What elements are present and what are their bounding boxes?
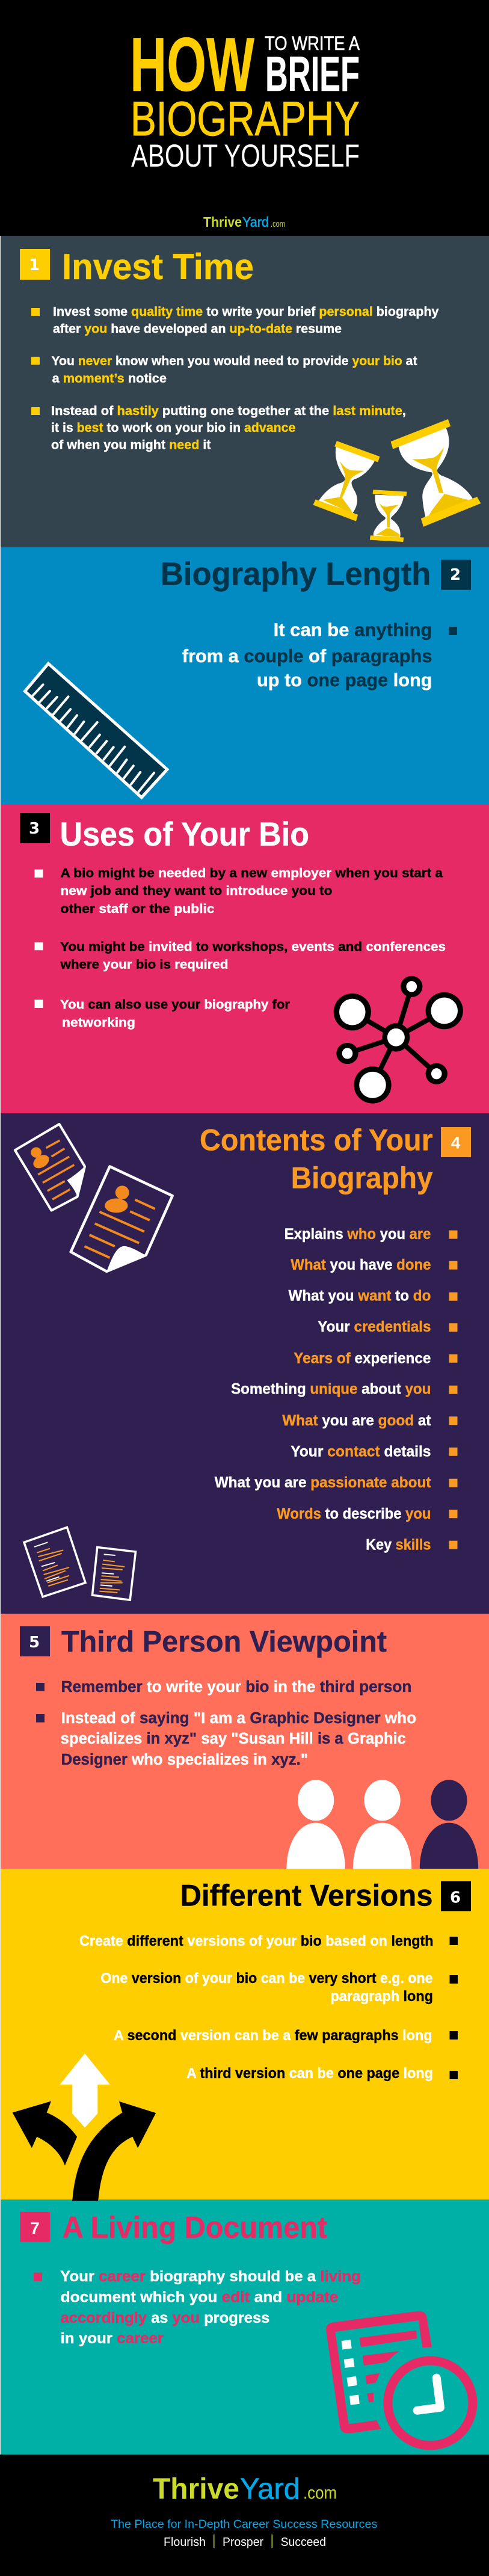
bullet list: A bio might be needed by a new employer when you start a: [60, 866, 443, 881]
number badge 2: 2: [450, 566, 461, 584]
icon: up arrow: [60, 2053, 110, 2127]
icon: checklist with clock: [326, 2311, 473, 2445]
panel: third person viewpoint: [0, 1614, 489, 1869]
number badge 7: [20, 2212, 50, 2242]
logo: ThriveYard.com: Thrive: [153, 2473, 239, 2506]
bullet list: after you have developed an up-to-date resume: [53, 322, 342, 336]
heading: A Living Document: A Living Document: [63, 2210, 327, 2244]
heading: Uses of Your Bio: Uses of Your Bio: [60, 815, 309, 853]
icon: person three: [420, 1780, 478, 1869]
checklist: [215, 1226, 457, 1553]
title: BIOGRAPHY: [131, 92, 360, 146]
number badge 5: [20, 1626, 50, 1656]
icon: left arrow: [13, 2101, 77, 2166]
icon: straight page: [92, 1547, 136, 1600]
bullet list: it is best to work on your bio in advance: [51, 421, 295, 435]
bullet list: You can also use your biography for: [60, 998, 290, 1012]
number badge 4: 4: [451, 1134, 461, 1152]
number badge 3: [20, 813, 50, 843]
logo: ThriveYard: Yard: [242, 214, 269, 230]
number badge 6: [441, 1881, 471, 1911]
bullet list: [31, 305, 439, 452]
checklist: What you are passionate about: [215, 1474, 431, 1491]
logo: ThriveYard: Thrive: [203, 214, 242, 230]
icon: person one: [286, 1780, 345, 1869]
bullet list: You might be invited to workshops, events and conferences: [60, 940, 446, 954]
checklist: Years of experience: [294, 1350, 431, 1366]
icon: large hourglass: [391, 419, 481, 527]
bullet list: Designer who specializes in xyz.": [61, 1751, 308, 1768]
icon: checklist: [326, 2311, 432, 2433]
icon: small hourglass: [370, 490, 407, 542]
checklist: Explains who you are: [284, 1226, 431, 1243]
bullet list: [36, 1679, 416, 1768]
checklist: Words to describe you: [277, 1505, 431, 1522]
icon: large resume: [71, 1166, 173, 1271]
bullet text: from a couple of paragraphs: [182, 645, 432, 666]
bullet list: Instead of saying "I am a Graphic Designer who: [61, 1710, 416, 1727]
bullet text: [34, 2268, 361, 2347]
bullet text: up to one page long: [257, 669, 432, 690]
header: [0, 0, 489, 236]
logo: ThriveYard.com: Yard: [240, 2473, 300, 2506]
number badge 1: 1: [29, 256, 40, 274]
logo: ThriveYard: .com: [271, 219, 285, 229]
bullet list: [79, 1933, 458, 2082]
number badge 1: [20, 249, 50, 280]
icon: clock: [388, 2361, 473, 2445]
motto: [164, 2535, 326, 2549]
heading: Contents of Your Biography: Contents of Your: [200, 1123, 433, 1157]
bullet list: One version of your bio can be very short e.g. one: [100, 1970, 432, 1987]
title: [130, 22, 360, 174]
bullet list: specializes in xyz" say "Susan Hill is a Graphic: [61, 1730, 406, 1747]
panel: uses of your bio: [0, 805, 489, 1113]
checklist: What you want to do: [289, 1288, 431, 1305]
bullet list: paragraph long: [331, 1988, 433, 2005]
number badge 3: 3: [29, 820, 40, 838]
tagline: The Place for In-Depth Career Success Resources: [111, 2518, 377, 2531]
icon: resumes: [15, 1124, 173, 1600]
motto: Prosper: [223, 2536, 263, 2549]
panel: contents of your biography: [0, 1113, 489, 1614]
bullet list: Create different versions of your bio based on length: [79, 1933, 434, 1949]
checklist: Your contact details: [291, 1443, 431, 1460]
bullet list: [35, 866, 446, 1030]
bullet list: of when you might need it: [51, 438, 211, 452]
panel: a living document: [0, 2199, 489, 2455]
bullet list: a moment’s notice: [52, 372, 167, 386]
heading: Biography Length: Biography Length: [161, 556, 431, 592]
title: BRIEF: [265, 47, 360, 102]
motto: Flourish: [164, 2536, 206, 2549]
icon: left hourglass: [313, 441, 380, 521]
logo: ThriveYard.com: [153, 2473, 337, 2506]
bullet list: networking: [62, 1016, 135, 1030]
title: TO WRITE A: [265, 32, 360, 54]
motto: Succeed: [281, 2536, 326, 2549]
heading: Different Versions: Different Versions: [180, 1879, 433, 1913]
panel: invest time: [0, 236, 489, 547]
icon: ruler: [25, 663, 167, 798]
icon: hourglasses: [313, 419, 481, 542]
heading: Invest Time: Invest Time: [62, 247, 254, 287]
bullet text: document which you edit and update: [61, 2289, 339, 2305]
bullet list: other staff or the public: [60, 902, 215, 916]
title: ABOUT YOURSELF: [131, 138, 360, 174]
icon: person two: [353, 1780, 411, 1869]
icon: right arrow: [72, 2101, 156, 2201]
panel: biography length: [0, 547, 489, 805]
number badge 2: [441, 560, 471, 590]
panel: different versions: [0, 1869, 489, 2201]
checklist: What you are good at: [282, 1412, 431, 1429]
icon: three people: [286, 1780, 478, 1869]
bullet list: Instead of hastily putting one together at the last minute,: [51, 404, 406, 418]
bullet list: A third version can be one page long: [186, 2065, 433, 2082]
bullet text: Your career biography should be a living: [60, 2268, 361, 2285]
logo: ThriveYard.com: .com: [303, 2483, 337, 2503]
footer: [0, 2455, 489, 2576]
bullet list: where your bio is required: [60, 958, 228, 972]
number badge 7: 7: [30, 2219, 40, 2237]
heading: Contents of Your Biography: Biography: [291, 1161, 433, 1195]
heading: Contents of Your Biography: [200, 1123, 433, 1195]
icon: small resume: [15, 1124, 85, 1211]
bullet text: [182, 619, 457, 690]
number badge 6: 6: [450, 1889, 461, 1907]
bullet list: Remember to write your bio in the third person: [61, 1679, 411, 1695]
bullet list: new job and they want to introduce you to: [60, 884, 332, 898]
bullet text: It can be anything: [274, 619, 432, 641]
icon: tilted page: [24, 1527, 85, 1597]
icon: forking arrows: [13, 2053, 156, 2201]
checklist: What you have done: [291, 1256, 431, 1273]
logo: ThriveYard: [203, 214, 285, 230]
checklist: Your credentials: [318, 1318, 431, 1335]
bullet text: accordingly as you progress: [61, 2310, 269, 2326]
icon: network: [334, 976, 463, 1104]
heading: Third Person Viewpoint: Third Person Viewpoint: [61, 1626, 387, 1658]
checklist: Key skills: [366, 1536, 431, 1553]
title: HOW: [130, 22, 254, 107]
number badge 4: [441, 1127, 471, 1157]
bullet list: You never know when you would need to provide your bio at: [52, 354, 417, 368]
checklist: Something unique about you: [231, 1381, 431, 1398]
number badge 5: 5: [29, 1634, 40, 1652]
bullet list: Invest some quality time to write your brief personal biography: [53, 305, 439, 319]
bullet list: A second version can be a few paragraphs long: [114, 2027, 432, 2044]
bullet text: in your career: [61, 2330, 164, 2347]
